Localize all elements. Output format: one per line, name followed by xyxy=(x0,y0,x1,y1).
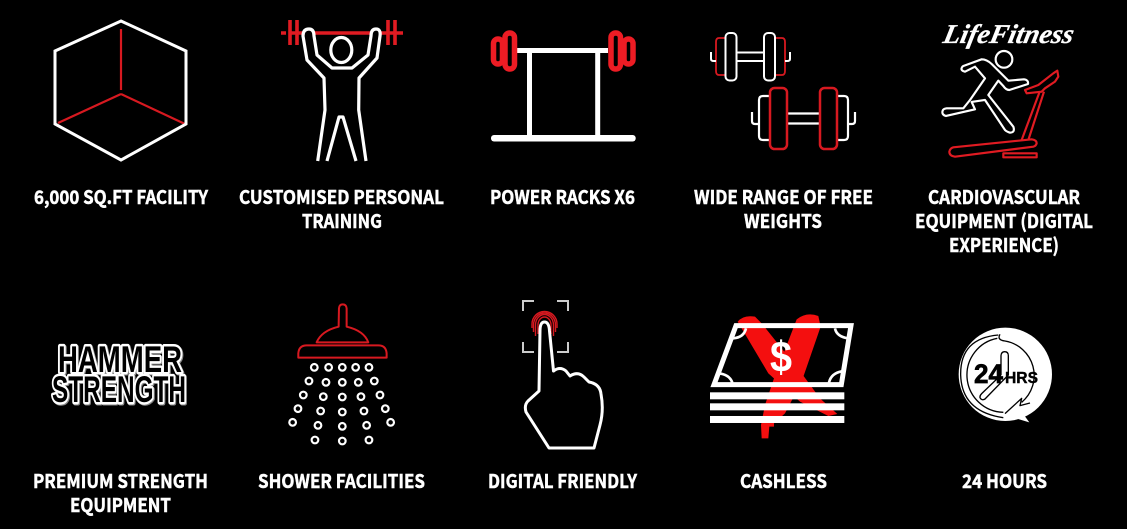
icon: fingerprint xyxy=(532,312,557,336)
logo: Hammer Strength xyxy=(52,339,186,410)
label: customised personal training: TRAINING xyxy=(302,207,382,234)
icon: dollar sign: $ xyxy=(770,333,792,382)
panel: digital friendly xyxy=(488,301,638,494)
icon: water drops xyxy=(289,364,394,444)
panel: cashless xyxy=(710,314,851,494)
label: premium strength equipment xyxy=(33,467,208,518)
icon: large dumbbell xyxy=(752,88,855,149)
label: cardiovascular equipment xyxy=(915,183,1093,258)
panel: premium strength equipment xyxy=(33,339,208,518)
clock text: HRS: HRS xyxy=(1005,370,1038,387)
label: premium strength equipment: EQUIPMENT xyxy=(70,491,171,518)
label: cardiovascular equipment: EXPERIENCE) xyxy=(949,231,1059,258)
label: customised personal training xyxy=(239,183,444,234)
icon: power rack xyxy=(491,33,636,142)
label: shower facilities: SHOWER FACILITIES xyxy=(258,467,425,494)
logo: Hammer Strength: STRENGTH xyxy=(52,369,186,410)
label: premium strength equipment: PREMIUM STRENGTH xyxy=(33,467,208,494)
icon: weightlifter xyxy=(281,20,403,161)
label: free weights: WEIGHTS xyxy=(744,207,822,234)
label: free weights: WIDE RANGE OF FREE xyxy=(694,183,873,210)
panel: power racks xyxy=(490,33,636,210)
panel: 6,000 sq.ft facility xyxy=(34,21,209,210)
clock text: 24: 24 xyxy=(974,359,1003,389)
icon: shower head xyxy=(298,304,387,358)
icon: treadmill xyxy=(949,71,1058,157)
icon: scan brackets xyxy=(523,301,568,352)
icon: red cross xyxy=(738,314,837,438)
icon: hexagon cube xyxy=(55,21,186,160)
logo: Life Fitness: LifeFitness xyxy=(940,19,1077,49)
icon: pointing hand xyxy=(525,322,602,448)
panel: shower facilities xyxy=(258,304,425,494)
label: free weights xyxy=(694,183,873,234)
icon: banknote stack xyxy=(710,326,851,423)
label: cardiovascular equipment: CARDIOVASCULAR xyxy=(928,183,1080,210)
icon: runner xyxy=(942,51,1028,133)
label: digital friendly: DIGITAL FRIENDLY xyxy=(488,467,638,494)
label: power racks: POWER RACKS X6 xyxy=(490,183,635,210)
panel: customised personal training xyxy=(239,20,444,234)
icon: 24 hour clock xyxy=(959,328,1052,422)
icon: small dumbbell xyxy=(711,33,790,80)
label: cardiovascular equipment: EQUIPMENT (DIGITAL xyxy=(915,207,1093,234)
label: cashless: CASHLESS xyxy=(740,467,827,494)
panel: free weights xyxy=(694,33,873,234)
panel: cardiovascular equipment xyxy=(915,19,1093,258)
label: 24 hours: 24 HOURS xyxy=(962,467,1047,494)
panel: 24 hours xyxy=(959,328,1052,494)
label: 6,000 sq.ft facility: 6,000 SQ.FT FACILITY xyxy=(34,183,209,210)
label: customised personal training: CUSTOMISED PERSONAL xyxy=(239,183,444,210)
logo: Hammer Strength: HAMMER xyxy=(58,339,182,380)
